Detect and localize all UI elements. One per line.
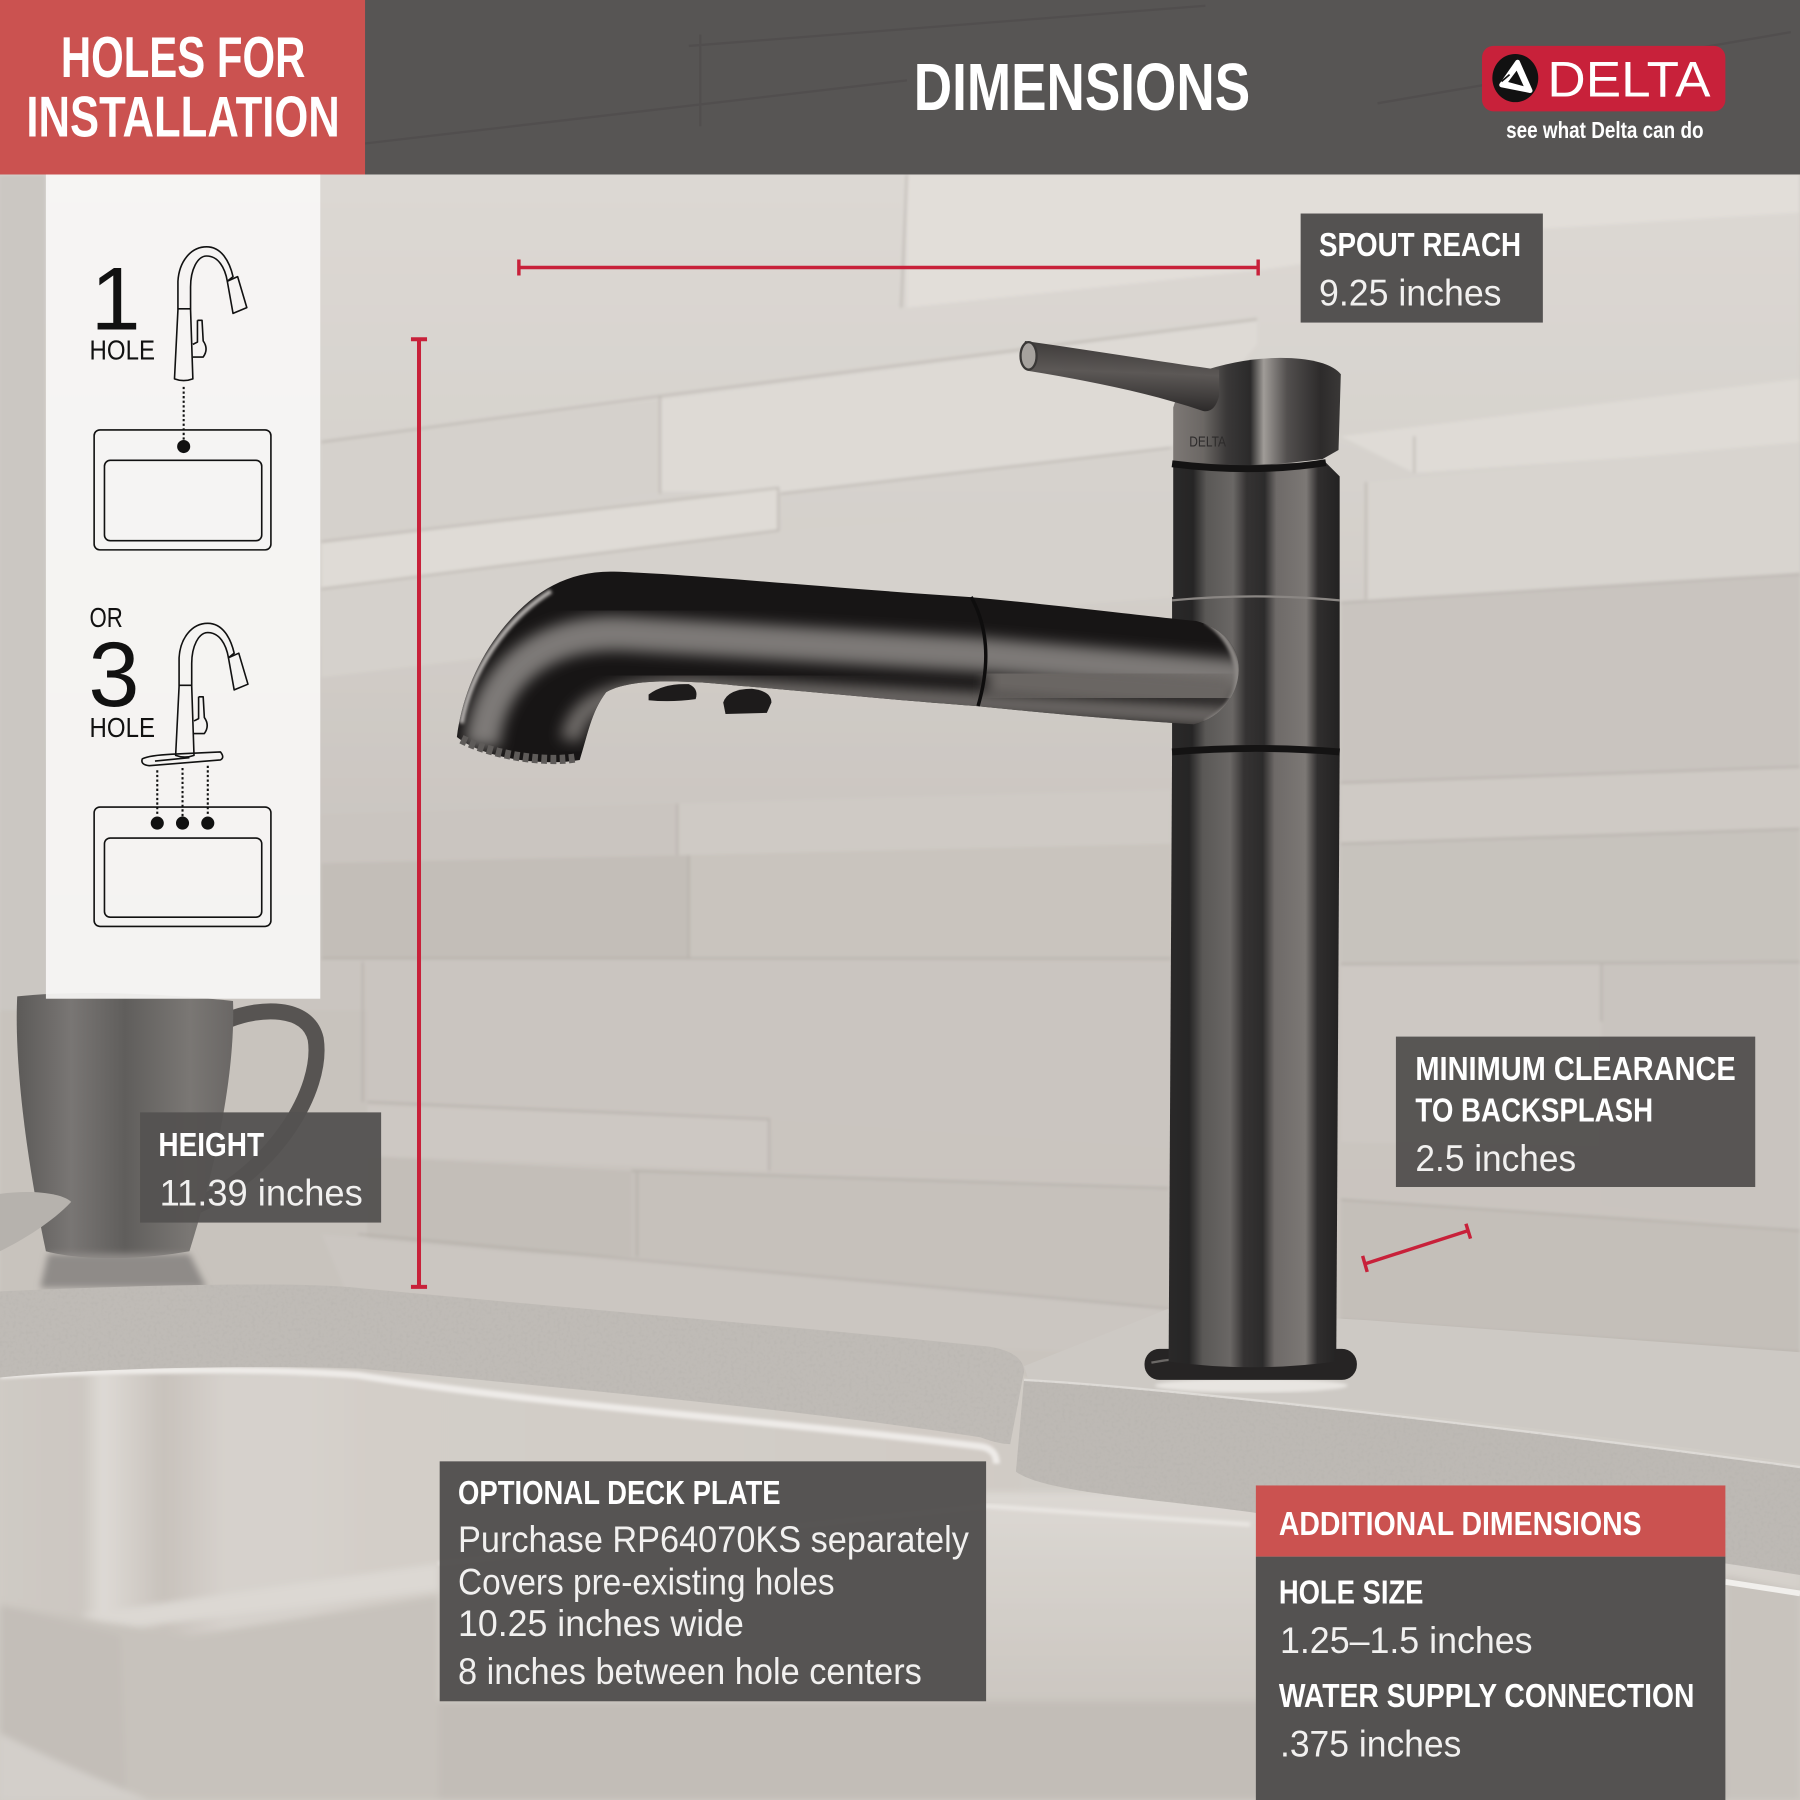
arrow: spout reach dimension (519, 259, 1258, 276)
one hole label: HOLE (90, 334, 155, 365)
faucet upper column (1173, 463, 1340, 597)
callout: height (140, 1112, 381, 1223)
callout: optional deck plate: 10.25 inches wide (458, 1603, 744, 1644)
background: tiled kitchen wall (0, 0, 1800, 1378)
faucet logo mark: DELTA (1189, 434, 1226, 451)
callout: minimum clearance (1396, 1037, 1755, 1187)
additional dimensions body (1256, 1557, 1725, 1800)
callout: height: HEIGHT (158, 1127, 264, 1164)
panel: holes for installation heading: HOLES FOR (61, 26, 305, 90)
icon: single-hole faucet (174, 247, 247, 381)
additional dimensions body: HOLE SIZE (1279, 1575, 1423, 1612)
dotted connectors (157, 766, 208, 816)
faucet base shadow and plate (1145, 1349, 1357, 1392)
faucet handle (1021, 341, 1219, 411)
spray buttons (649, 684, 771, 714)
one hole sink (94, 430, 271, 550)
three hole label: OR (90, 602, 123, 633)
callout: optional deck plate: Covers pre-existing holes (458, 1562, 835, 1603)
logo: Delta: DELTA (1547, 50, 1711, 107)
panel: holes for installation heading: INSTALLATION (26, 86, 340, 150)
additional dimensions body: WATER SUPPLY CONNECTION (1279, 1678, 1694, 1715)
logo: Delta (1482, 46, 1725, 143)
arrow: height dimension (411, 339, 427, 1288)
additional dimensions heading (1256, 1485, 1725, 1557)
callout: optional deck plate: OPTIONAL DECK PLATE (458, 1475, 781, 1512)
additional dimensions heading: ADDITIONAL DIMENSIONS (1279, 1506, 1642, 1543)
callout: height: 11.39 inches (160, 1172, 363, 1213)
callout: spout reach: 9.25 inches (1319, 272, 1502, 313)
three hole sink (94, 807, 271, 926)
column grooves (1172, 463, 1340, 752)
additional dimensions body: 1.25–1.5 inches (1280, 1620, 1533, 1661)
callout: minimum clearance: 2.5 inches (1415, 1138, 1576, 1179)
one hole label (90, 248, 155, 365)
arrow: clearance dimension (1363, 1224, 1471, 1272)
faucet lower column (1169, 752, 1340, 1367)
faucet cap (1173, 358, 1341, 466)
three hole label (88, 602, 155, 743)
right countertop front edge (1016, 1380, 1800, 1575)
right countertop top surface (1024, 1309, 1800, 1464)
icon: three-hole faucet with deck plate (142, 623, 248, 766)
three hole label: 3 (88, 624, 139, 726)
callout: optional deck plate (440, 1461, 986, 1701)
three hole label: HOLE (90, 712, 155, 743)
callout: minimum clearance: TO BACKSPLASH (1415, 1093, 1653, 1130)
additional dimensions body: .375 inches (1280, 1723, 1461, 1764)
panel: holes for installation heading (0, 0, 365, 174)
left countertop edge (0, 1285, 1024, 1444)
faucet (457, 341, 1357, 1392)
callout: spout reach (1301, 214, 1543, 323)
callout: minimum clearance: MINIMUM CLEARANCE (1415, 1051, 1736, 1088)
logo: Delta: see what Delta can do (1506, 117, 1704, 143)
callout: spout reach: SPOUT REACH (1319, 227, 1521, 264)
sink basin and countertop (0, 1285, 1800, 1800)
panel: additional dimensions (1256, 1485, 1725, 1800)
coffee mug (0, 993, 317, 1288)
dotted connector (183, 387, 185, 440)
sink basins (0, 1372, 1800, 1800)
callout: optional deck plate: 8 inches between hole centers (458, 1651, 922, 1692)
faucet spout (457, 572, 1246, 762)
callout: optional deck plate: Purchase RP64070KS separately (458, 1519, 969, 1560)
one hole label: 1 (91, 248, 140, 348)
faucet middle column (1172, 597, 1340, 752)
header bar (0, 0, 1800, 174)
title: DIMENSIONS (914, 51, 1250, 125)
panel: hole diagrams (46, 174, 320, 999)
